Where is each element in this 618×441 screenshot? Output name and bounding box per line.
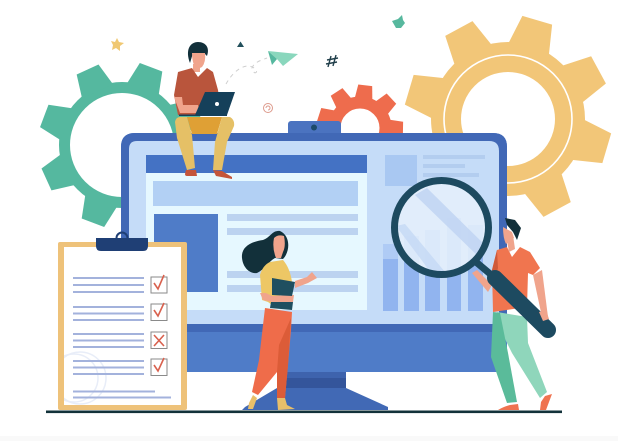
icon: spiral bbox=[264, 104, 272, 112]
shirt bbox=[492, 247, 540, 312]
monitor body bbox=[121, 133, 507, 372]
icon: yellow gear bbox=[403, 14, 613, 224]
arms bbox=[472, 270, 548, 317]
icon: paper plane with dashed trail bbox=[226, 51, 298, 84]
hand bbox=[539, 310, 549, 321]
arm bbox=[174, 97, 200, 113]
webcam bbox=[288, 121, 341, 137]
face bbox=[273, 235, 285, 258]
clipboard clip bbox=[96, 232, 148, 251]
left forearm bbox=[260, 293, 294, 302]
figure: woman with folder bbox=[242, 231, 317, 410]
trousers bbox=[175, 117, 234, 170]
shirt bbox=[174, 68, 222, 116]
sidebar thumbnail and lines bbox=[385, 155, 485, 186]
icon: teal leaf bbox=[392, 15, 405, 28]
shoes bbox=[498, 394, 552, 410]
monitor bbox=[121, 121, 507, 410]
clipboard bbox=[50, 232, 187, 410]
head bbox=[503, 218, 521, 252]
checklist text lines bbox=[73, 277, 171, 398]
icon: hash mark bbox=[326, 55, 338, 67]
trousers bbox=[252, 308, 292, 398]
figure: man with laptop bbox=[174, 42, 235, 179]
shoes bbox=[185, 170, 232, 179]
feet bbox=[248, 395, 295, 410]
hair and face bbox=[188, 42, 208, 72]
magnifier handle bbox=[495, 278, 548, 330]
web page panel bbox=[146, 155, 367, 310]
icon: star bbox=[111, 38, 124, 51]
monitor stand bbox=[242, 372, 388, 410]
shirt bbox=[260, 260, 292, 305]
right arm bbox=[295, 272, 317, 288]
bar chart on screen bbox=[383, 218, 483, 311]
folder lower part bbox=[270, 302, 293, 310]
icon: red gear bbox=[316, 84, 403, 154]
laptop bbox=[179, 92, 235, 116]
figure: man with magnifier bbox=[472, 218, 552, 410]
faint circle stamp bbox=[64, 351, 107, 405]
screen bbox=[129, 141, 499, 324]
folder bbox=[272, 278, 295, 296]
magnifying glass bbox=[394, 180, 495, 278]
hair bbox=[242, 231, 288, 273]
icon: teal gear bbox=[38, 61, 206, 229]
ground line bbox=[46, 410, 562, 413]
icon: small triangle bbox=[237, 42, 244, 47]
trousers bbox=[491, 312, 547, 403]
checkbox marks bbox=[151, 275, 167, 376]
